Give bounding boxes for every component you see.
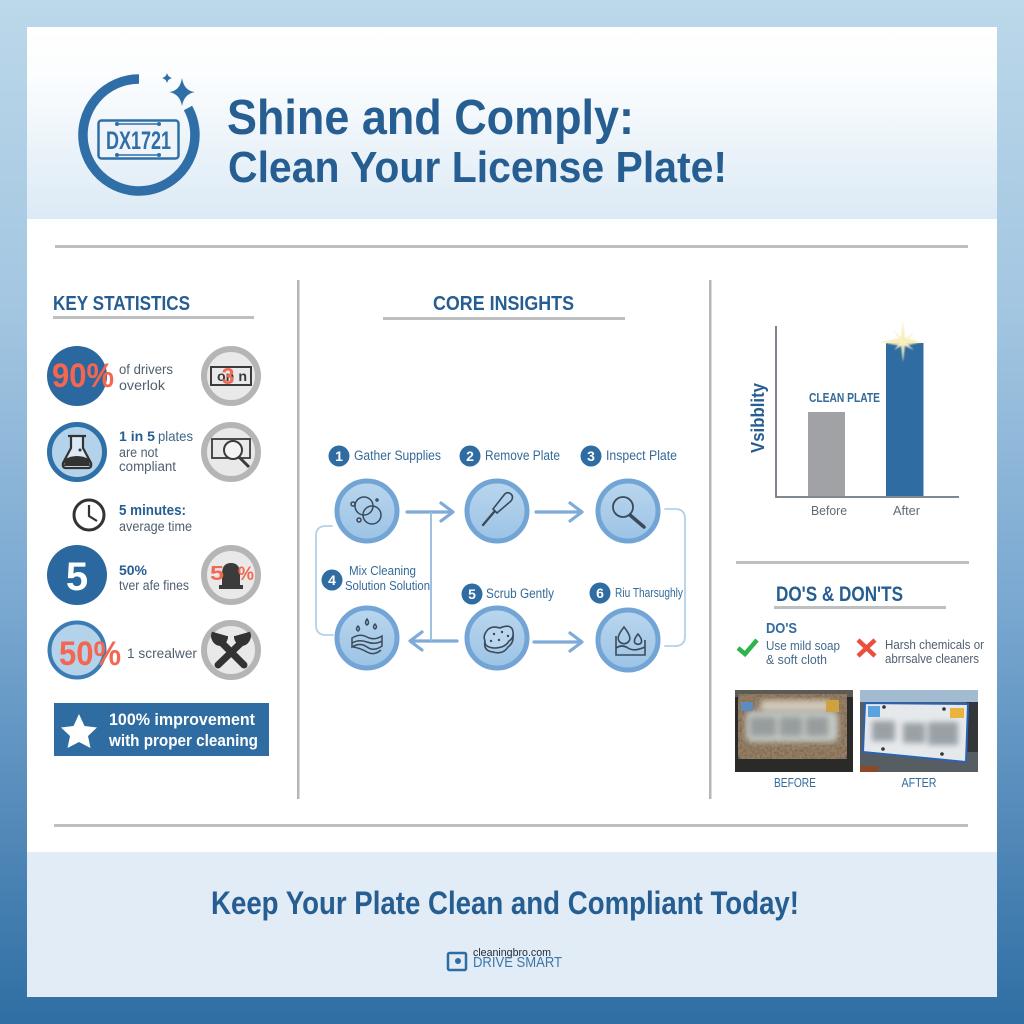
title (227, 91, 727, 192)
don't: harsh chemicals: Harsh chemicals or (885, 637, 985, 652)
website address: cleaningbro.com (473, 947, 551, 959)
stat: 50% screwdriver (50, 622, 197, 678)
title: Clean Your License Plate! (228, 143, 727, 192)
stat: 50% screwdriver: 50% (59, 635, 121, 673)
stat: 5 minutes average time: 5 minutes: (119, 502, 186, 519)
panel: do's and don'ts (735, 583, 985, 790)
do: mild soap: Use mild soap (766, 638, 840, 653)
icon: plate with red digit (204, 349, 258, 403)
photo: clean plate after (860, 690, 978, 772)
callout: 100% improvement: with proper cleaning (108, 731, 258, 750)
stat: 1 in 5 plates not compliant (50, 424, 193, 480)
label: before photo: BEFORE (774, 775, 816, 790)
step 5: scrub gently: Scrub Gently (486, 586, 554, 601)
photo: dirty plate before (735, 690, 853, 772)
bar chart: Vsibblity (748, 383, 768, 453)
don't: harsh chemicals (858, 637, 985, 666)
stat: 90% of drivers overlook: of drivers (119, 362, 173, 377)
icon: alarm beacon: 5 (210, 563, 224, 585)
icon: license plate logo with sparkles: DX1721 (106, 127, 171, 155)
panel: core insights (316, 293, 685, 670)
bar chart: After (893, 503, 921, 518)
step 1: gather supplies: 1 (335, 448, 343, 464)
footer call to action: Keep Your Plate Clean and Compliant Today! (211, 885, 799, 921)
step 2: remove plate (460, 446, 560, 541)
bar chart (748, 326, 959, 518)
step 5: scrub gently: 5 (468, 586, 476, 602)
icon: plate with red digit: on n (217, 368, 247, 384)
don't: harsh chemicals: abrrsalve cleaners (885, 651, 979, 666)
icon: plate under magnifier (204, 425, 258, 479)
flow arrows (316, 503, 685, 651)
stat: 5 and 50% fines: 50% (119, 562, 148, 578)
heading: do's and don'ts: DO'S & DON'TS (776, 583, 903, 606)
stat: 5 and 50% fines: tver afe fines (119, 578, 189, 593)
icon: alarm beacon (204, 548, 258, 602)
callout: 100% improvement (54, 703, 269, 756)
step 2: remove plate: Remove Plate (485, 448, 560, 463)
bar chart: Before (811, 503, 847, 518)
step 6: rinse thoroughly: Riu Tharsughly (615, 585, 683, 600)
step 1: gather supplies: Gather Supplies (354, 448, 441, 463)
callout: 100% improvement: 100% improvement (109, 710, 255, 729)
stat: 1 in 5 plates not compliant: 1 in 5 (119, 428, 155, 444)
step 3: inspect plate: Inspect Plate (606, 448, 677, 463)
stat: 90% of drivers overlook: 90% (52, 357, 114, 395)
step 4: mix cleaning solution: 4 (328, 572, 336, 588)
step 4: mix cleaning solution: Mix Cleaning (349, 563, 416, 578)
bar chart: CLEAN PLATE (809, 390, 880, 405)
icon: license plate logo with sparkles (83, 73, 195, 191)
icon: drive smart logo (448, 953, 466, 970)
stat: 1 in 5 plates not compliant: plates (158, 428, 193, 444)
panel: visibility chart (748, 320, 959, 518)
step 6: rinse thoroughly (590, 582, 683, 670)
do: mild soap (738, 620, 840, 667)
heading: core insights: CORE INSIGHTS (433, 293, 574, 315)
step 2: remove plate: 2 (466, 448, 474, 464)
stat: 5 and 50% fines: 5 (66, 555, 88, 599)
icon: crossed wrench and screwdriver (204, 623, 258, 677)
step 5: scrub gently (462, 584, 554, 668)
stat: 5 and 50% fines (47, 545, 189, 605)
icon: plate with red digit: 3 (222, 363, 234, 389)
step 1: gather supplies (328, 446, 441, 541)
panel: footer band (27, 852, 997, 997)
panel: header band (27, 27, 997, 219)
step 4: mix cleaning solution (322, 563, 430, 668)
stat: 50% screwdriver: 1 screalwer (127, 645, 197, 661)
panel: key statistics (47, 293, 269, 756)
icon: alarm beacon: % (238, 564, 254, 585)
title: Shine and Comply: (227, 91, 634, 145)
step 4: mix cleaning solution: Solution Solution (345, 578, 430, 593)
stat: 90% of drivers overlook: overlok (119, 378, 165, 393)
stat: 5 minutes average time: average time (119, 519, 192, 534)
heading: key statistics: KEY STATISTICS (53, 293, 190, 315)
heading: key statistics (53, 293, 254, 319)
label: after photo: AFTER (902, 775, 936, 790)
step 3: inspect plate (580, 446, 677, 541)
stat: 1 in 5 plates not compliant: compliant (119, 459, 176, 474)
stat: 5 minutes average time (74, 500, 192, 534)
icon: sparkle on bar (880, 320, 922, 362)
step 6: rinse thoroughly: 6 (596, 585, 604, 601)
do: mild soap: DO'S (766, 620, 797, 637)
stat: 1 in 5 plates not compliant: are not (119, 445, 158, 460)
brand name: DRIVE SMART (473, 955, 562, 971)
do: mild soap: & soft cloth (766, 652, 827, 667)
stat: 90% of drivers overlook (47, 346, 173, 406)
step 3: inspect plate: 3 (587, 448, 595, 464)
heading: core insights (383, 293, 625, 320)
